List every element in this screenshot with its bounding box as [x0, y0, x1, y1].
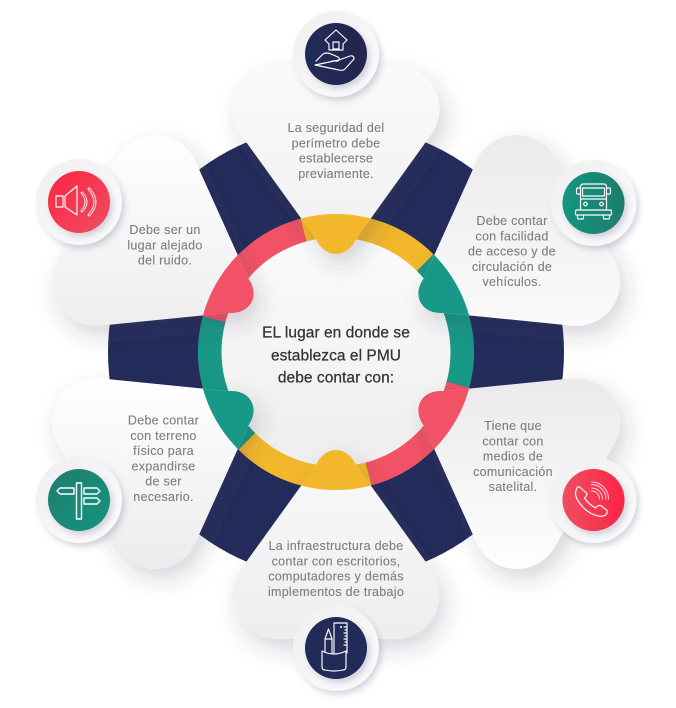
text: comunicación: medios de [483, 450, 543, 464]
title: central text: EL lugar en donde se [262, 324, 410, 342]
central ring [182, 212, 490, 492]
text: acceso: Debe contar [476, 214, 548, 228]
title: central text: debe contar con: [278, 370, 394, 386]
text: acceso [468, 214, 556, 289]
panel: facilidad de acceso [416, 135, 642, 346]
panel: seguridad del perímetro [233, 11, 439, 254]
icon: bus [550, 160, 636, 246]
text: infraestructura [268, 539, 404, 599]
text: terreno [128, 414, 199, 504]
navy spokes disc [108, 124, 564, 580]
text: ruido [127, 223, 203, 268]
text: seguridad: establecerse [299, 152, 373, 166]
icon: pencil cup [293, 605, 379, 691]
text: seguridad: previamente. [298, 167, 374, 181]
text: seguridad: perímetro debe [292, 136, 380, 150]
panel: comunicación satelital [416, 378, 642, 588]
text: comunicación [473, 419, 553, 494]
text: comunicación: satelital. [489, 480, 537, 494]
text: ruido: Debe ser un [129, 223, 201, 237]
title: central text: establezca el PMU [271, 348, 401, 364]
text: terreno: expandirse [132, 459, 195, 473]
text: acceso: circulación de [472, 260, 552, 274]
text: comunicación: contar con [482, 434, 544, 448]
central disc [222, 238, 450, 466]
panel: alejado del ruido [36, 136, 268, 346]
panel: infraestructura [233, 450, 439, 691]
text: seguridad: La seguridad del [288, 121, 384, 135]
text: infraestructura: implementos de trabajo [268, 585, 404, 599]
text: comunicación: comunicación [473, 465, 553, 479]
text: terreno: de ser [145, 475, 182, 489]
text: infraestructura: computadores y demás [268, 570, 404, 584]
text: ruido: del ruido. [138, 254, 192, 268]
icon: signpost [36, 457, 122, 543]
panel: terreno físico [36, 378, 268, 588]
text: comunicación: Tiene que [484, 419, 542, 433]
text: seguridad [288, 121, 384, 181]
text: terreno: con terreno [130, 429, 197, 443]
title: central text [262, 324, 410, 386]
text: ruido: lugar alejado [127, 238, 203, 252]
text: infraestructura: contar con escritorios, [272, 554, 400, 568]
text: acceso: vehículos. [482, 275, 542, 289]
icon: house in hand [293, 11, 379, 97]
icon: phone [550, 457, 636, 543]
text: acceso: con facilidad [475, 229, 549, 243]
text: infraestructura: La infraestructura debe [268, 539, 404, 553]
text: acceso: de acceso y de [468, 245, 556, 259]
text: terreno: físico para [133, 444, 194, 458]
text: terreno: necesario. [133, 490, 194, 504]
icon: speaker [36, 159, 122, 245]
text: terreno: Debe contar [128, 414, 199, 428]
